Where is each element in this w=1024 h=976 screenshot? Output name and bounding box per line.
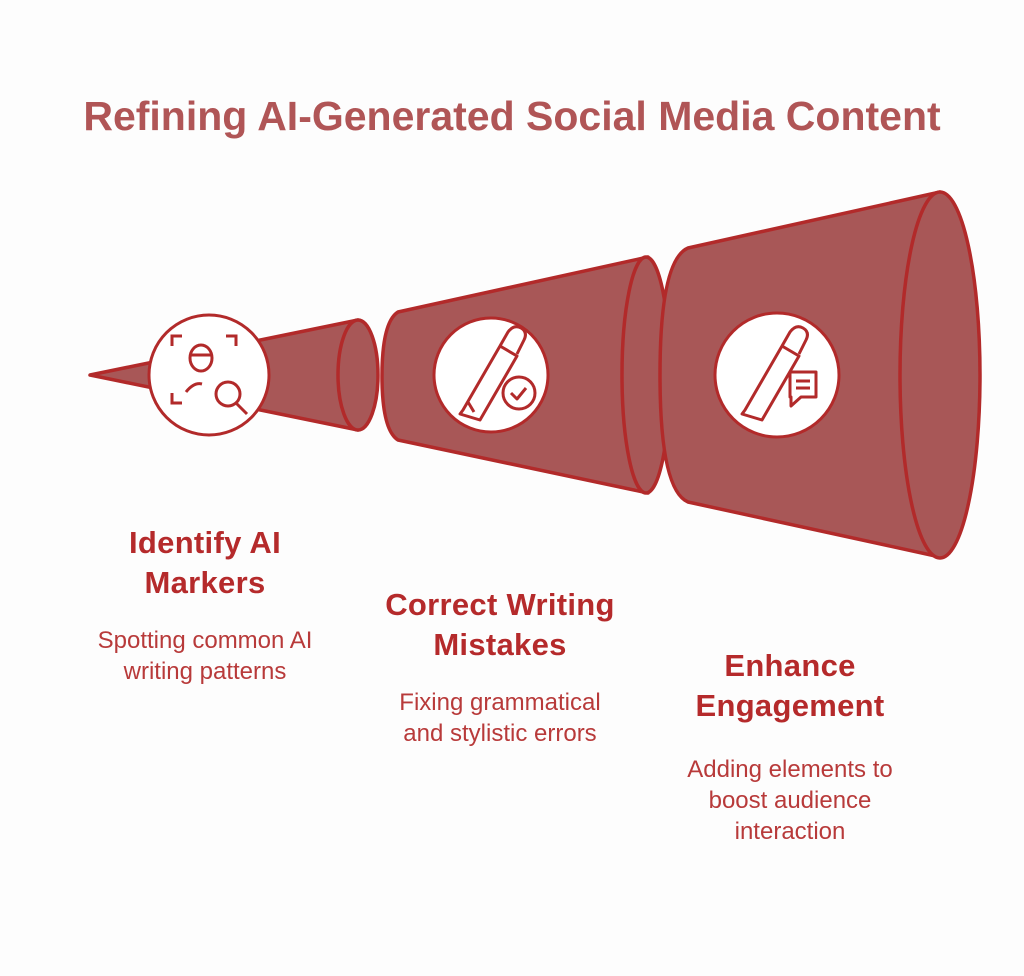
step 1 text: Identify AI (129, 525, 281, 560)
step 2 text: Fixing grammatical (399, 689, 601, 716)
icon: face scan search (149, 315, 269, 435)
step 1 text: writing patterns (124, 658, 286, 685)
icon: pencil chat (715, 313, 839, 437)
cone 2 (382, 257, 670, 493)
step 2 text: Mistakes (433, 627, 567, 662)
step 3 text (687, 648, 893, 845)
step 3 text: Engagement (695, 688, 885, 723)
step 2 text (385, 587, 615, 747)
step 3 text: Adding elements to (687, 756, 893, 783)
step 1 text (98, 525, 312, 685)
cone 1 (90, 320, 378, 430)
step 1 text: Spotting common AI (98, 627, 312, 654)
step 3 text: Enhance (724, 648, 856, 683)
icon: pencil check (434, 318, 548, 432)
step 3 text: interaction (735, 818, 845, 845)
step 3 text: boost audience (709, 787, 871, 814)
step 2 text: and stylistic errors (403, 720, 597, 747)
title: Refining AI-Generated Social Media Content (83, 93, 941, 139)
step 1 text: Markers (144, 565, 266, 600)
step 2 text: Correct Writing (385, 587, 615, 622)
cone 3 (660, 192, 980, 558)
